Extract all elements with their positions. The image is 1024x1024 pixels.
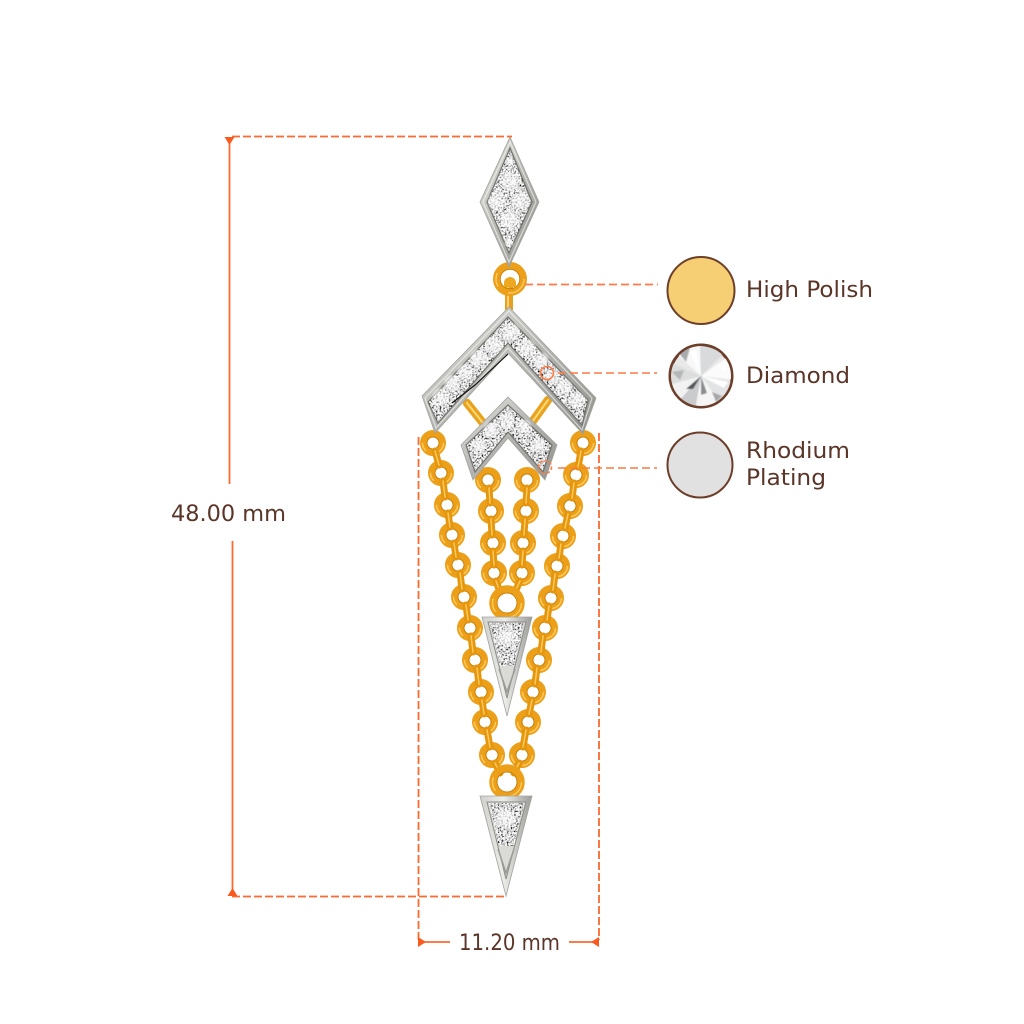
gold bail ring and stem <box>496 265 524 310</box>
chain: inner left <box>478 470 504 592</box>
small chevron <box>461 397 557 480</box>
chain: inner right <box>512 470 538 592</box>
legend swatch: rhodium plating <box>668 432 732 498</box>
legend label: diamond: Diamond <box>746 364 850 389</box>
leader: diamond <box>540 366 657 380</box>
legend swatch: high polish <box>668 257 734 324</box>
chain: left outer <box>422 432 502 773</box>
gold struts behind chevrons <box>467 400 548 428</box>
width dimension lines <box>418 433 599 942</box>
bottom triangle pendant <box>480 796 532 896</box>
leader: high polish <box>525 284 658 286</box>
legend label: high polish: High Polish <box>746 278 873 303</box>
leader: rhodium plating <box>538 460 657 474</box>
jump ring: middle pendant <box>492 588 522 618</box>
height label: 48.00 mm <box>171 502 286 527</box>
legend label: rhodium plating: Rhodium <box>746 439 850 464</box>
height dimension lines <box>230 136 512 896</box>
width label: 11.20 mm <box>459 931 560 956</box>
chain: right outer <box>512 432 594 773</box>
jump ring: bottom pendant <box>492 768 522 796</box>
large chevron <box>422 307 596 434</box>
legend swatch: diamond <box>668 345 735 410</box>
middle triangle pendant <box>482 617 532 716</box>
legend label: rhodium plating: Plating <box>746 466 826 491</box>
top kite pendant <box>480 137 539 267</box>
